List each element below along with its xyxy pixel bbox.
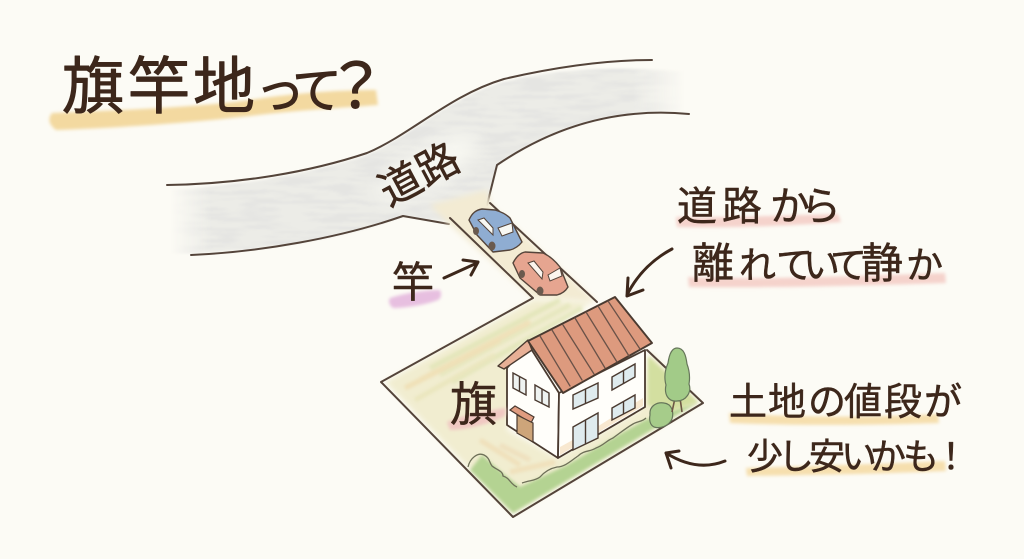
red car windows	[528, 261, 562, 281]
plot fill	[385, 300, 700, 514]
right wall	[558, 350, 645, 458]
blue car wheels	[473, 227, 479, 235]
label: pole	[389, 259, 478, 308]
callout text line 1: 道路から	[677, 185, 841, 229]
door canopy	[510, 406, 534, 423]
pole fill	[430, 190, 597, 302]
cars	[469, 209, 568, 296]
callout: cheap	[666, 382, 969, 477]
pole highlight	[389, 290, 441, 308]
tree foliage	[665, 348, 690, 401]
callout text line 2: 離	[692, 240, 734, 287]
road outline right	[487, 113, 689, 205]
arrow: cheap	[666, 451, 725, 468]
callout text line 2: 少し安いかも！	[747, 436, 969, 477]
label: flag	[447, 378, 506, 431]
road	[165, 60, 690, 255]
flag text: 旗	[450, 378, 497, 431]
callout: quiet	[627, 185, 946, 296]
car: red	[513, 252, 568, 296]
highlight line 1	[676, 214, 841, 227]
bush right	[650, 403, 673, 428]
car: blue	[469, 209, 522, 252]
land plot	[381, 190, 703, 517]
highlight line 2	[688, 273, 946, 287]
road outline bottom	[191, 216, 449, 255]
title text: ？	[325, 53, 387, 122]
hedge	[468, 403, 673, 487]
front windows	[573, 364, 635, 450]
title text: って	[255, 63, 342, 119]
callout text line 2: か	[906, 245, 943, 286]
hedge line	[522, 418, 646, 483]
road centre patch for label	[371, 125, 485, 211]
pole text: 竿	[392, 259, 434, 306]
door	[517, 415, 533, 442]
tree trunk	[672, 398, 682, 412]
arrow: quiet	[627, 249, 672, 296]
flag highlight	[447, 408, 506, 430]
title text: 旗竿地	[62, 53, 255, 122]
blue car windows	[478, 218, 513, 236]
hedge bush left outline	[468, 454, 517, 487]
grass right of house	[648, 356, 698, 412]
roof ridges	[540, 301, 640, 386]
road surface	[165, 69, 690, 254]
highlight line 1	[729, 413, 939, 425]
road outline top	[167, 60, 652, 185]
title highlight	[49, 90, 378, 130]
grass strip	[470, 402, 698, 513]
callout text line 2: 静	[861, 240, 903, 287]
wall base wash	[560, 398, 643, 455]
tree	[665, 348, 690, 412]
arrow: pole	[444, 260, 478, 278]
left wall	[507, 344, 559, 458]
roof	[528, 297, 652, 393]
title	[49, 53, 387, 130]
highlight line 2	[746, 461, 946, 476]
house	[498, 297, 652, 458]
gable windows	[513, 373, 549, 407]
plot outline	[381, 203, 703, 517]
gable eave	[498, 340, 532, 369]
callout text line 1: 土地の値段が	[729, 382, 962, 424]
road label: 道路	[371, 134, 467, 215]
red car wheels	[519, 270, 525, 278]
callout text line 2: れていて	[739, 245, 867, 286]
plot hatching	[405, 300, 582, 472]
